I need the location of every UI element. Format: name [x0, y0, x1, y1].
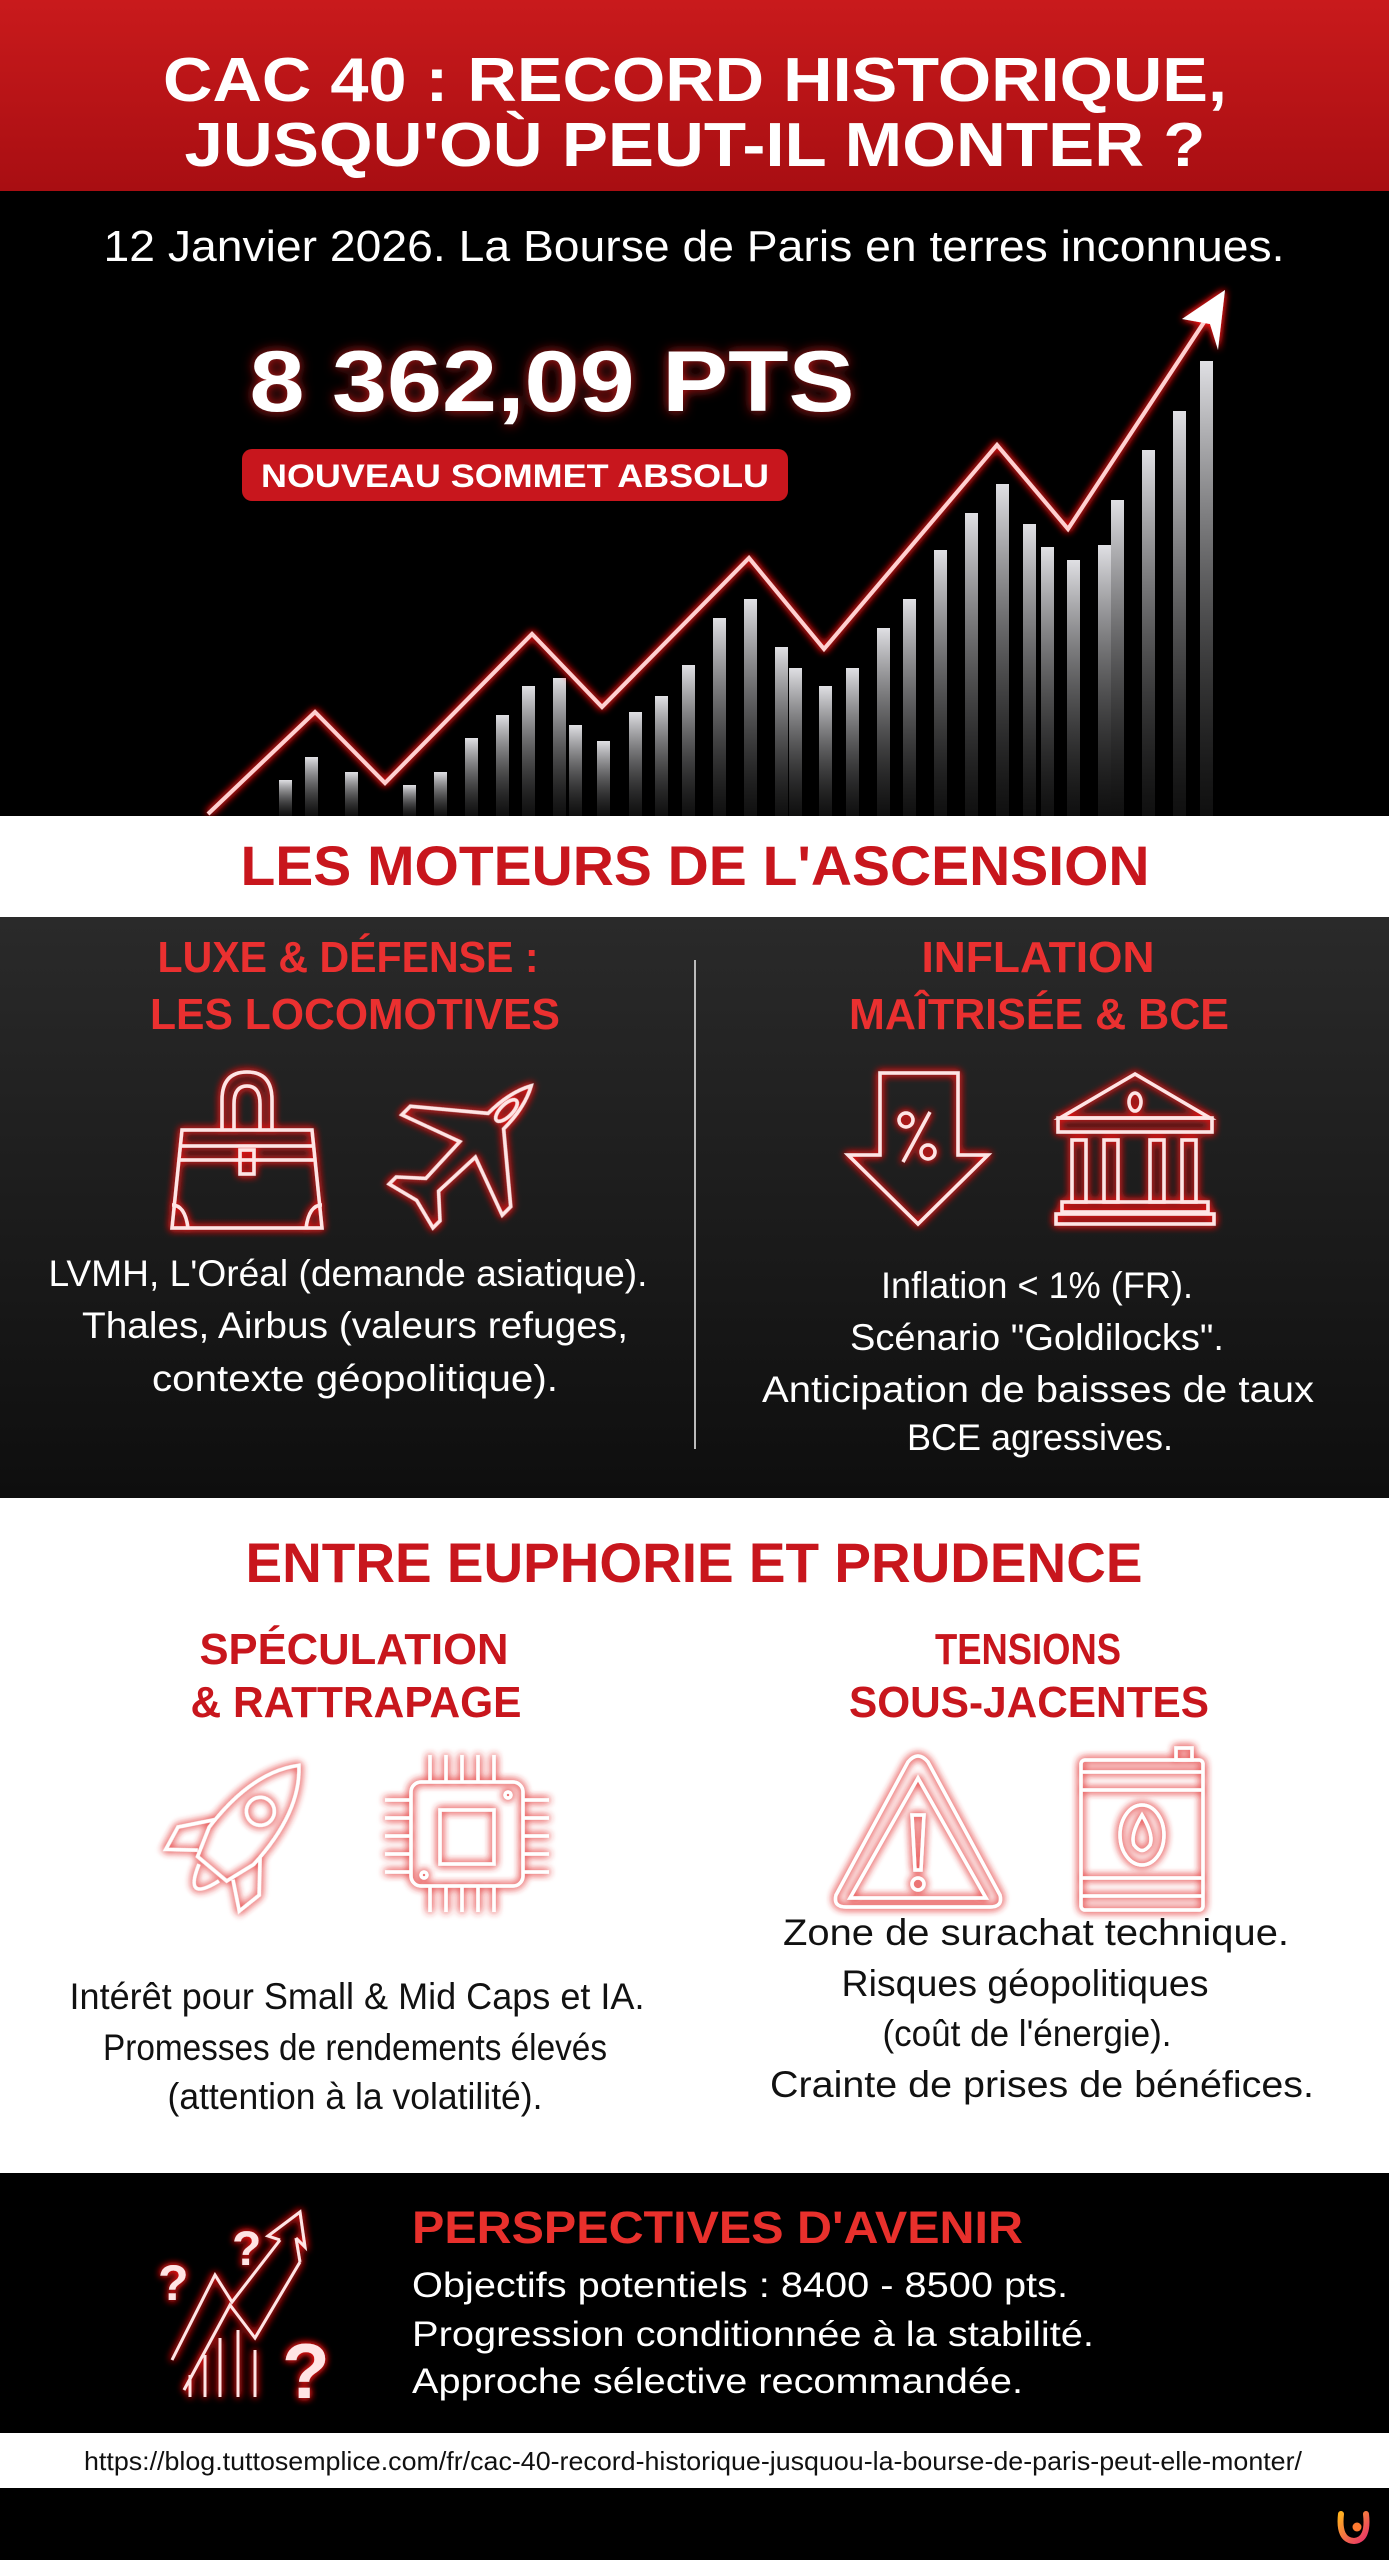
perspectives text — [412, 2266, 1094, 2401]
left text: Thales, Airbus (valeurs refuges, — [82, 1305, 628, 1346]
right subheading — [849, 1625, 1209, 1727]
chart: bars and rising line — [208, 290, 1225, 816]
perspectives heading: PERSPECTIVES D'AVENIR — [412, 2202, 1023, 2253]
perspectives text: Approche sélective recommandée. — [412, 2362, 1023, 2401]
icon: chart with question marks — [158, 2212, 330, 2415]
panel: moteurs — [0, 917, 1389, 1498]
right text: Scénario "Goldilocks". — [850, 1317, 1224, 1358]
left subheading — [190, 1624, 522, 1727]
title band: CAC 40 : RECORD HISTORIQUE, — [163, 46, 1227, 115]
left text: LVMH, L'Oréal (demande asiatique). — [48, 1253, 648, 1294]
right heading: INFLATION — [922, 933, 1154, 982]
right text — [770, 1912, 1314, 2105]
icon: chart with question marks: ? — [158, 2255, 189, 2311]
right text — [762, 1265, 1315, 1458]
icon: chart with question marks: ? — [232, 2223, 261, 2276]
right text: Zone de surachat technique. — [783, 1912, 1289, 1953]
badge: NOUVEAU SOMMET ABSOLU — [261, 458, 769, 494]
right text: Anticipation de baisses de taux — [762, 1369, 1315, 1410]
heading: moteurs — [0, 816, 1389, 917]
left text — [48, 1253, 648, 1399]
icon: bank — [1056, 1074, 1214, 1224]
perspectives text: Objectifs potentiels : 8400 - 8500 pts. — [412, 2266, 1068, 2305]
title band — [0, 0, 1389, 191]
right subheading: TENSIONS — [935, 1625, 1121, 1674]
right heading — [849, 933, 1229, 1039]
subtitle: 12 Janvier 2026. La Bourse de Paris en terres inconnues. — [104, 222, 1284, 271]
icon: percent down arrow — [848, 1073, 988, 1224]
left heading — [150, 932, 560, 1039]
title band: JUSQU'OÙ PEUT-IL MONTER ? — [184, 111, 1206, 180]
panel: euphorie et prudence — [0, 1498, 1389, 2173]
badge — [242, 449, 788, 501]
left text — [70, 1976, 644, 2117]
hero panel — [0, 191, 1389, 816]
icon: warning — [835, 1756, 1001, 1907]
right text: BCE agressives. — [907, 1417, 1173, 1458]
left text: contexte géopolitique). — [152, 1358, 558, 1399]
heading: moteurs: LES MOTEURS DE L'ASCENSION — [240, 834, 1150, 897]
left heading: LUXE & DÉFENSE : — [158, 932, 538, 982]
footer url — [0, 2433, 1389, 2488]
icon: chart with question marks: ? — [282, 2327, 330, 2415]
right text: Crainte de prises de bénéfices. — [770, 2064, 1314, 2105]
footer url: https://blog.tuttosemplice.com/fr/cac-40-record-historique-jusquou-la-bourse-de-paris-peut-elle-monter/ — [84, 2446, 1303, 2476]
left subheading: SPÉCULATION — [200, 1624, 508, 1674]
icon: oil barrel — [1081, 1748, 1203, 1910]
big number: 8 362,09 PTS — [250, 334, 854, 430]
icon: handbag — [172, 1072, 322, 1228]
left text: (attention à la volatilité). — [168, 2076, 542, 2117]
right text: Risques géopolitiques — [842, 1963, 1208, 2004]
heading: ENTRE EUPHORIE ET PRUDENCE — [246, 1531, 1142, 1594]
right text: Inflation < 1% (FR). — [881, 1265, 1193, 1306]
bottom band with logo — [0, 2488, 1389, 2560]
left subheading: & RATTRAPAGE — [190, 1678, 522, 1727]
perspectives text: Progression conditionnée à la stabilité. — [412, 2315, 1094, 2354]
left text: Intérêt pour Small & Mid Caps et IA. — [70, 1976, 644, 2017]
right subheading: SOUS-JACENTES — [849, 1678, 1209, 1727]
right text: (coût de l'énergie). — [882, 2013, 1172, 2054]
icon: rocket — [155, 1731, 340, 1922]
left text: Promesses de rendements élevés — [103, 2027, 607, 2068]
left heading: LES LOCOMOTIVES — [150, 990, 560, 1039]
right heading: MAÎTRISÉE & BCE — [849, 989, 1229, 1039]
icon: chip — [385, 1755, 549, 1912]
panel: perspectives — [0, 2173, 1389, 2433]
icon: fighter jet — [361, 1036, 581, 1256]
